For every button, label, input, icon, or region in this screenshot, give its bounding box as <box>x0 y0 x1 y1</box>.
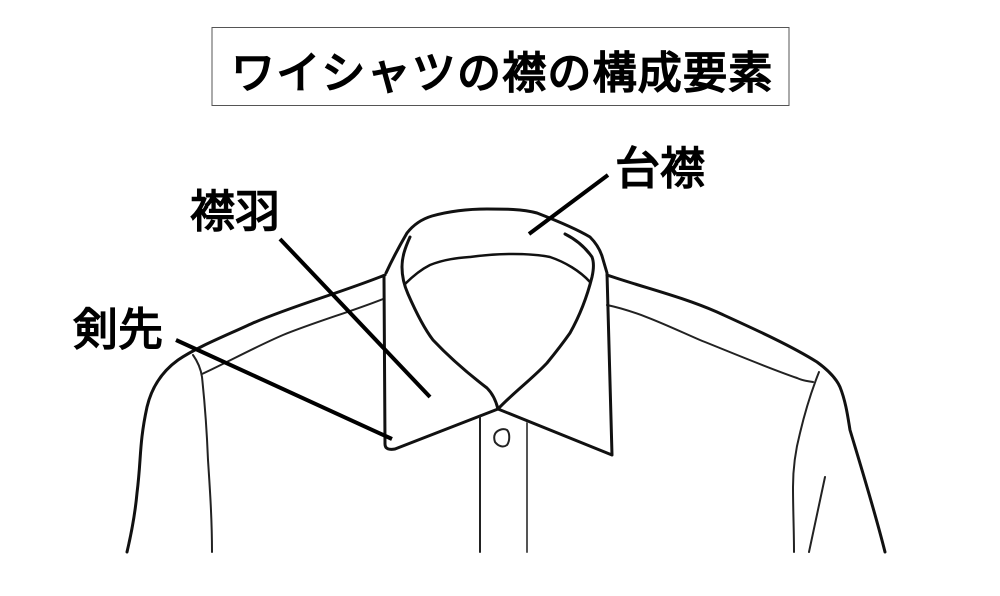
label: collar point: 剣先 <box>73 304 163 355</box>
label: collar leaf: 襟羽 <box>190 186 280 237</box>
right yoke seam <box>607 305 813 382</box>
right shoulder and sleeve outline <box>607 275 885 552</box>
pointer line: collar stand <box>529 175 608 234</box>
right collar inner edge <box>498 234 594 409</box>
left yoke seam <box>202 299 383 374</box>
title: ワイシャツの襟の構成要素 <box>231 49 773 98</box>
sleeve fold <box>809 477 825 552</box>
left shoulder and sleeve outline <box>127 275 385 552</box>
button <box>494 429 509 446</box>
collar stand and outer edge <box>384 209 612 455</box>
title <box>212 28 789 106</box>
right sleeve seam <box>793 372 819 552</box>
left collar inner edge <box>402 237 498 409</box>
pointer line: collar point <box>176 340 392 439</box>
left sleeve seam <box>193 355 212 552</box>
label: collar stand: 台襟 <box>615 143 705 194</box>
placket <box>479 417 481 552</box>
collar band line <box>405 254 590 284</box>
pointer line: collar leaf <box>280 239 430 397</box>
shirt illustration <box>127 209 885 552</box>
